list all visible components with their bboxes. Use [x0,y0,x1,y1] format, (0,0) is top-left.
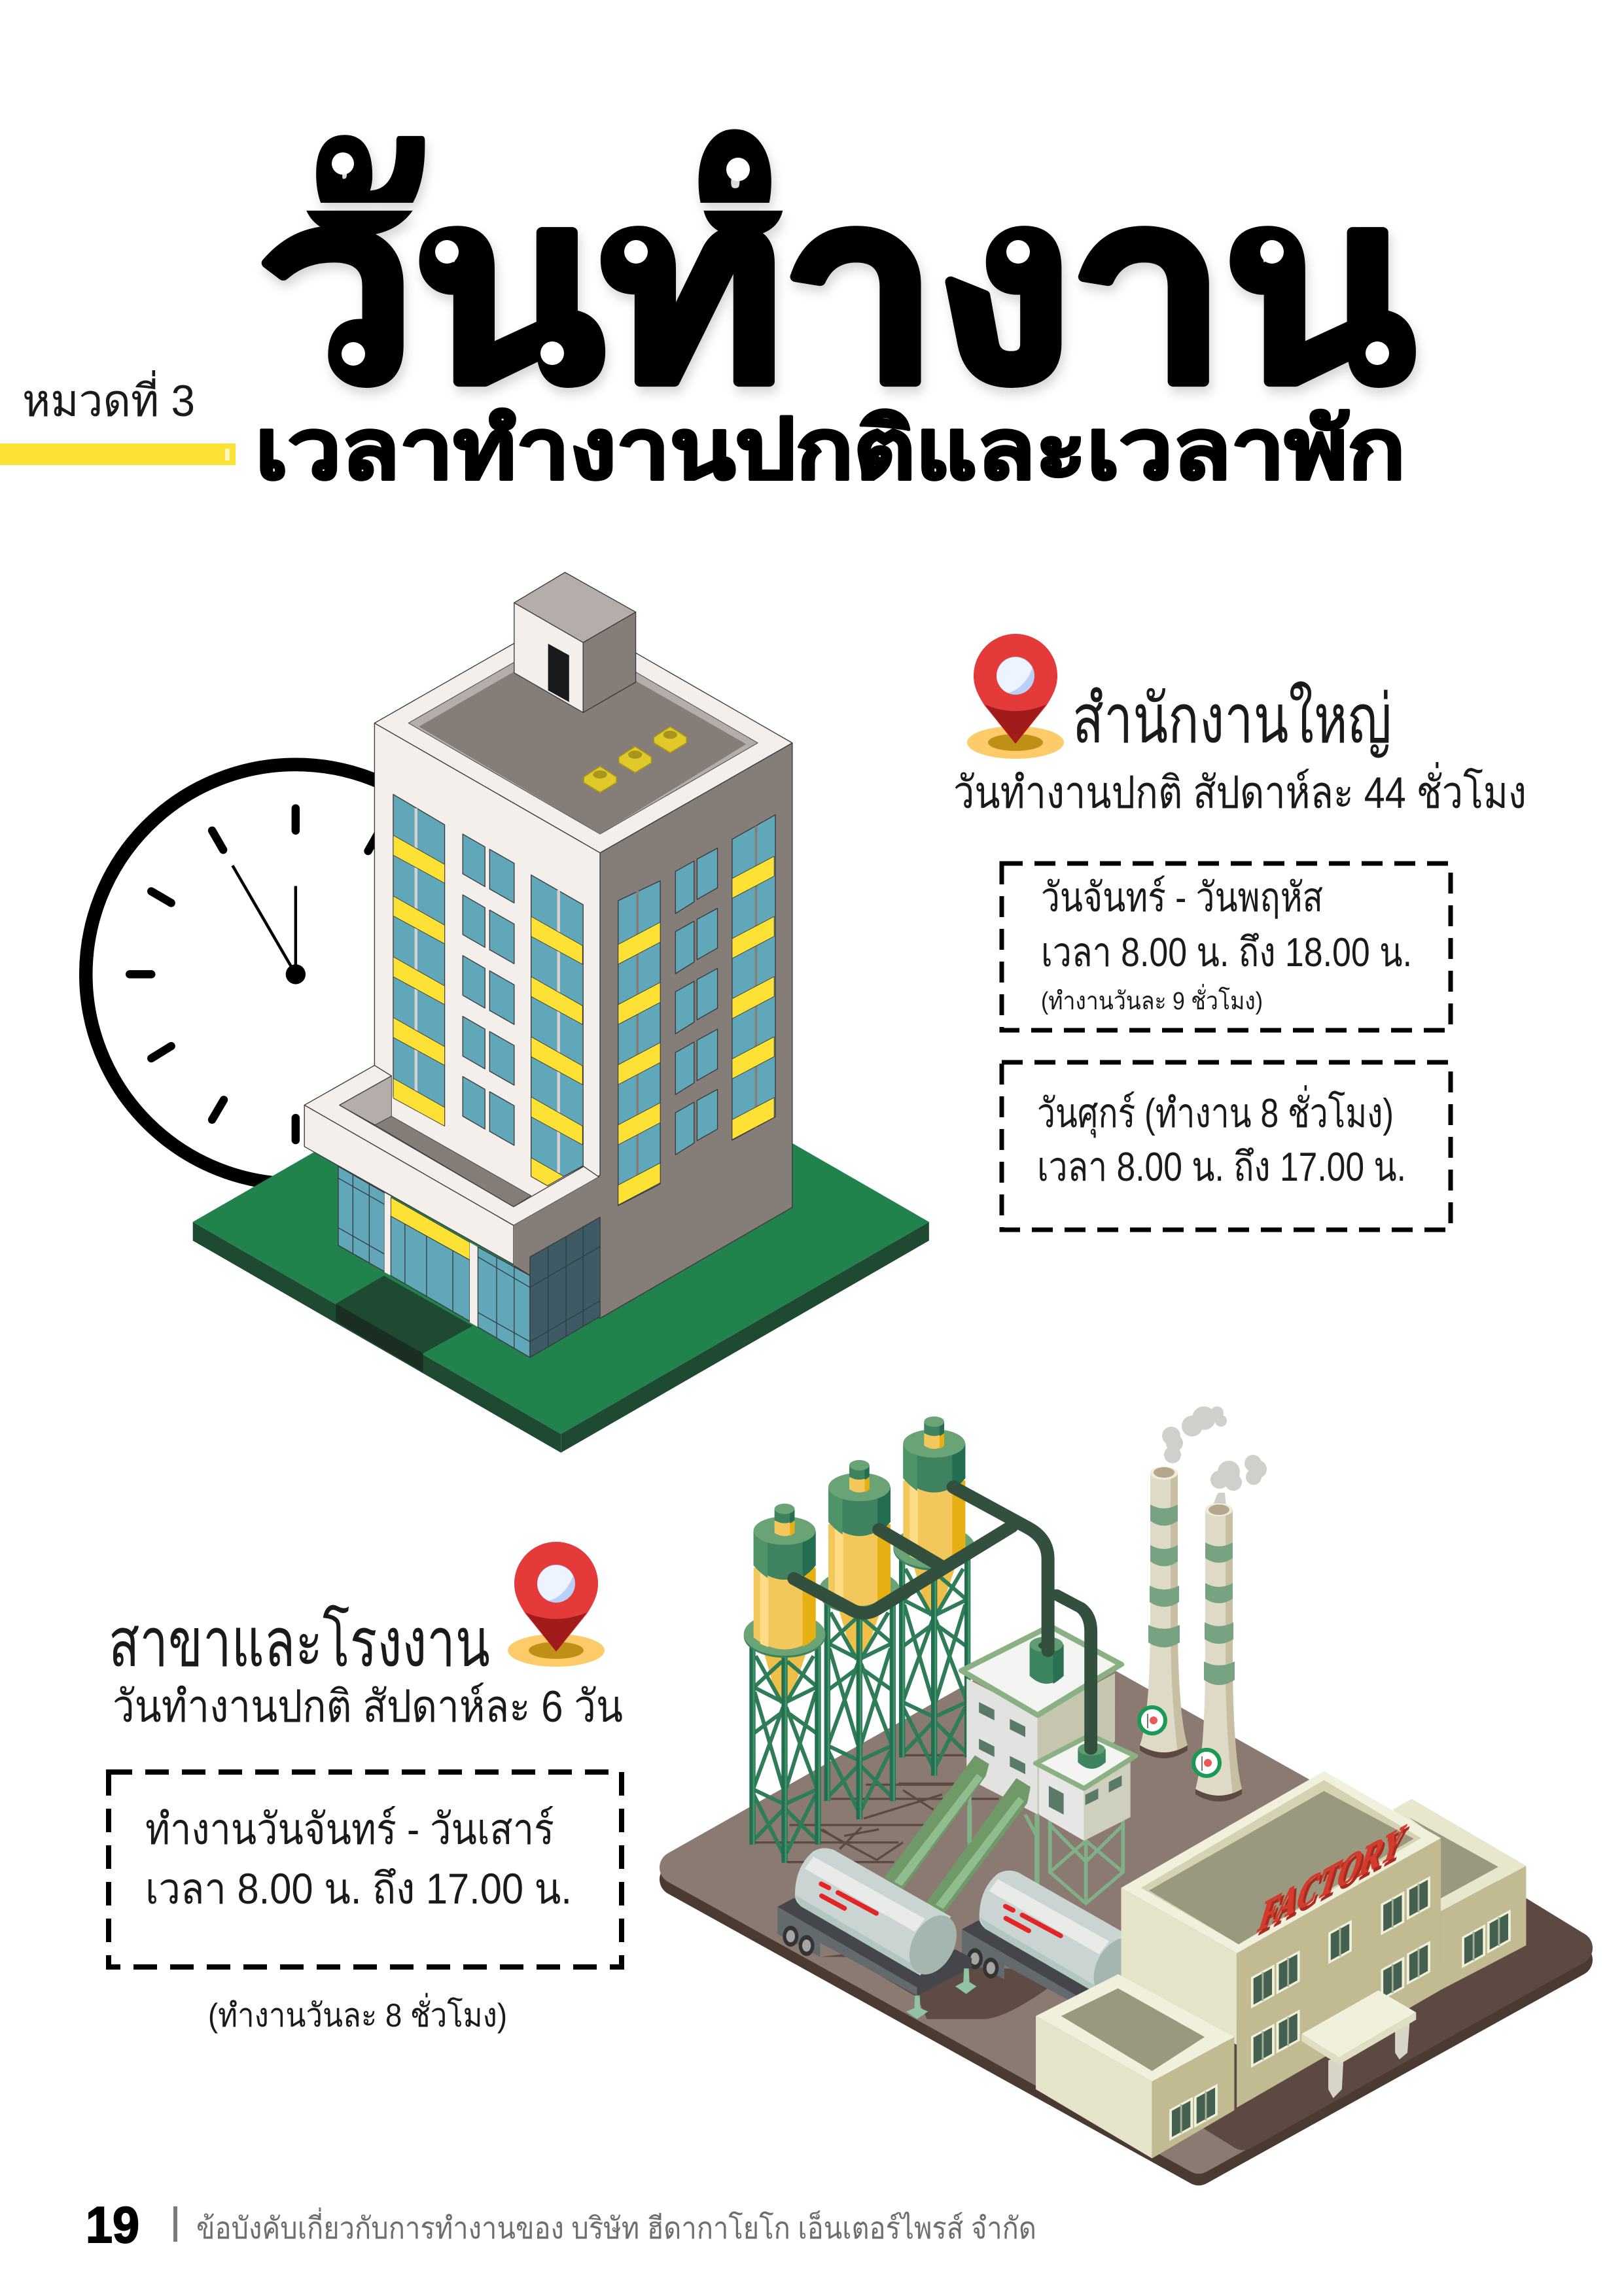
main pipes [794,1487,1048,1650]
tanker truck 1 [777,1848,972,1996]
pin icon: branches and factories [508,1542,605,1667]
schedule box: Monday to Thursday: (ทำงานวันละ 9 ชั่วโมง) [1041,984,1263,1015]
small tower [1036,1735,1135,1841]
factory building [1036,1771,1526,2159]
conveyors [885,1755,1031,1913]
yellow accent bar [0,444,236,465]
head office working hours: วันทำงานปกติ สัปดาห์ละ 44 ชั่วโมง [953,762,1527,818]
schedule box: Monday to Saturday: เวลา 8.00 น. ถึง 17.00 น. [145,1864,572,1913]
schedule box: Friday: วันศุกร์ (ทำงาน 8 ชั่วโมง) [1037,1085,1394,1138]
branch pipe to small tower [1056,1595,1091,1749]
silos [744,1416,975,1863]
conveyors and tanker trucks [777,1755,1156,2019]
footer text: ข้อบังคับเกี่ยวกับการทำงานของ บริษัท ฮีดากาโยโก เอ็นเตอร์ไพรส์ จำกัด [196,2207,1036,2245]
schedule box: Monday to Thursday: วันจันทร์ - วันพฤหัส [1041,875,1323,920]
footer page number: 19 [86,2196,139,2253]
mixing tower [962,1626,1121,1815]
subtitle: เวลาทำงานปกติและเวลาพัก [255,403,1405,496]
office building [304,572,792,1357]
illustration: office building and clock [86,572,929,1453]
schedule box: Friday [1002,1062,1451,1230]
balcony [304,1066,600,1266]
branches working days: วันทำงานปกติ สัปดาห์ละ 6 วัน [113,1682,623,1731]
schedule box: Monday to Thursday: เวลา 8.00 น. ถึง 18.00 น. [1041,930,1412,975]
lattice under towers [970,1794,1123,1904]
windows: right face [618,815,775,1206]
schedule box: Monday to Saturday [109,1772,622,1967]
heading: head office: สำนักงานใหญ่ [1072,682,1392,758]
factory sign: FACTORY [1253,1813,1411,1942]
daily hours note: (ทำงานวันละ 8 ชั่วโมง) [208,1993,507,2034]
pipe collars [1030,1637,1106,1769]
tanker truck 2 [962,1871,1156,2018]
factory sign: FACTORY [1255,1816,1413,1945]
lower lattice legs [970,1805,1037,1884]
title: วันทำงาน [260,148,1414,432]
chimneys with smoke [1140,1406,1267,1801]
factory ground base [676,1654,1576,2169]
heading: branches and factories: สาขาและโรงงาน [109,1605,490,1681]
jack stands [906,1968,976,2019]
floor shadows [752,1755,1049,2019]
title: วันทำงาน [272,105,1377,530]
ground floor glass [338,1166,600,1357]
windows: left face [393,794,583,1186]
chapter label: หมวดที่ 3 [22,370,195,426]
footer divider [173,2206,177,2242]
green platform [193,1010,929,1453]
chimney logos [1139,1707,1220,1776]
schedule box: Friday: เวลา 8.00 น. ถึง 17.00 น. [1037,1145,1406,1190]
schedule box: Monday to Saturday: ทำงานวันจันทร์ - วันเสาร์ [145,1805,554,1853]
pin icon: head office [967,634,1064,759]
illustration: factory [676,1406,1576,2169]
clock [86,765,505,1184]
schedule box: Monday to Thursday [1002,863,1451,1030]
